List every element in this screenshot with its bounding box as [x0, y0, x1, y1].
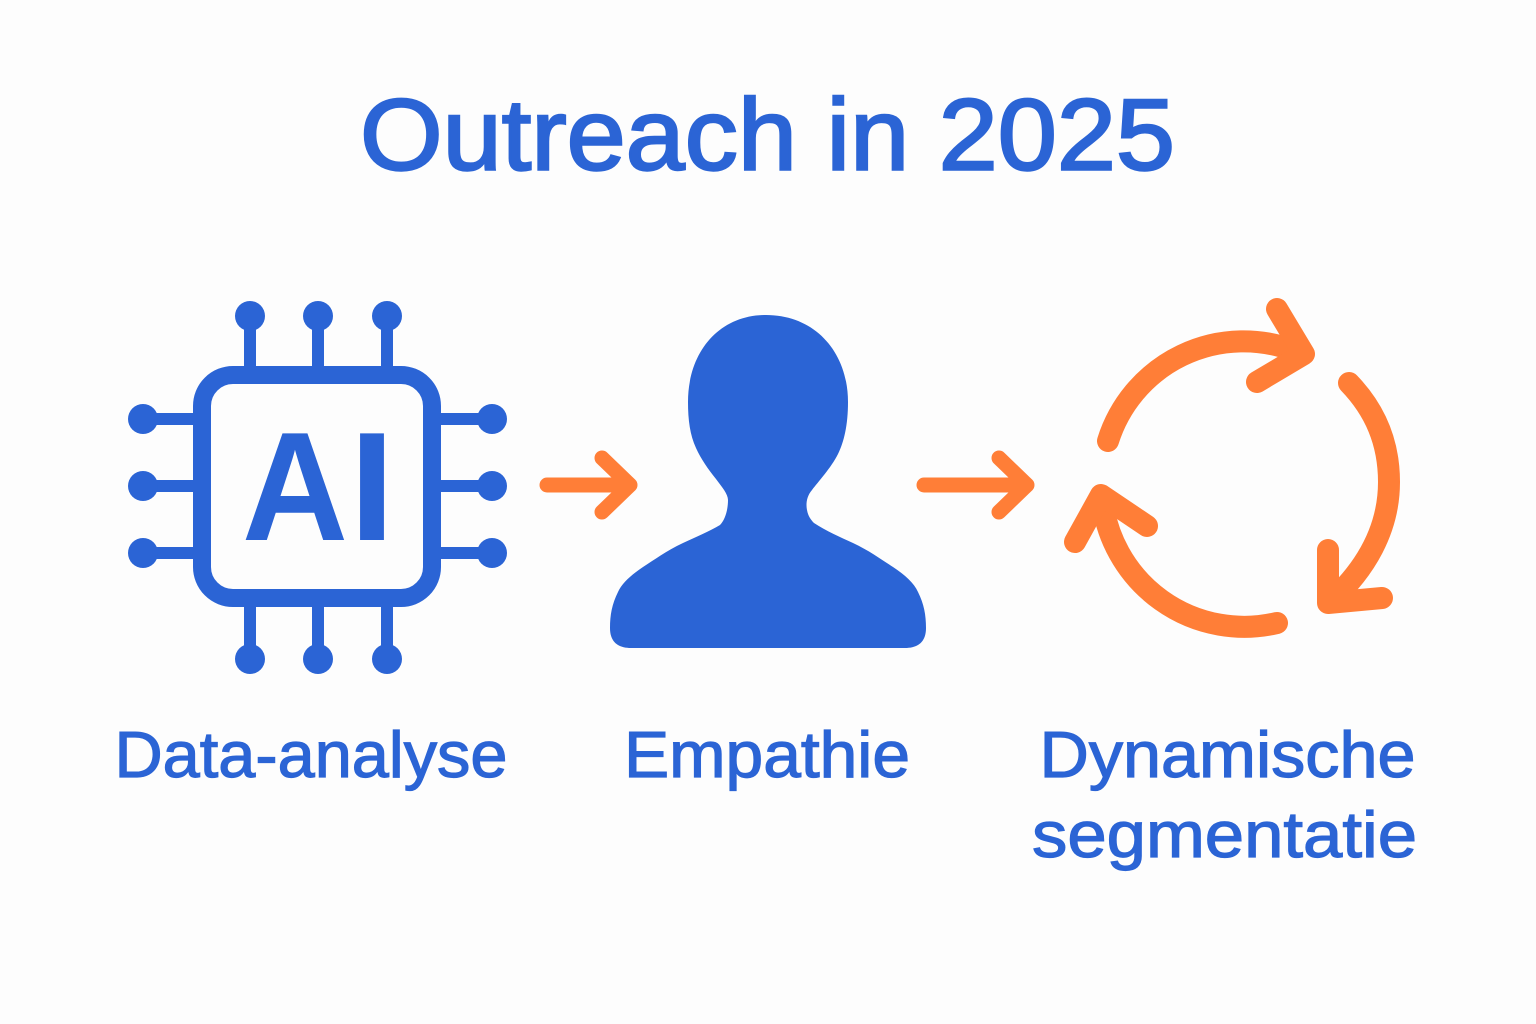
label: Dynamische segmentatie: Dynamische — [1040, 718, 1416, 791]
arrow: person to cycle — [924, 458, 1027, 512]
label: Empathie: Empathie — [624, 718, 910, 791]
icon: cycle arrows — [1075, 309, 1389, 627]
label: Data-analyse: Data-analyse — [114, 718, 508, 791]
icon: AI chip: A — [242, 400, 348, 573]
icon: AI chip — [128, 301, 507, 674]
label: Dynamische segmentatie — [1032, 718, 1417, 871]
arrow: AI to person — [547, 458, 630, 512]
title: Outreach in 2025 — [360, 80, 1175, 192]
icon: person — [610, 315, 926, 648]
icon: AI chip: I — [349, 400, 395, 573]
label: Dynamische segmentatie: segmentatie — [1032, 798, 1417, 871]
